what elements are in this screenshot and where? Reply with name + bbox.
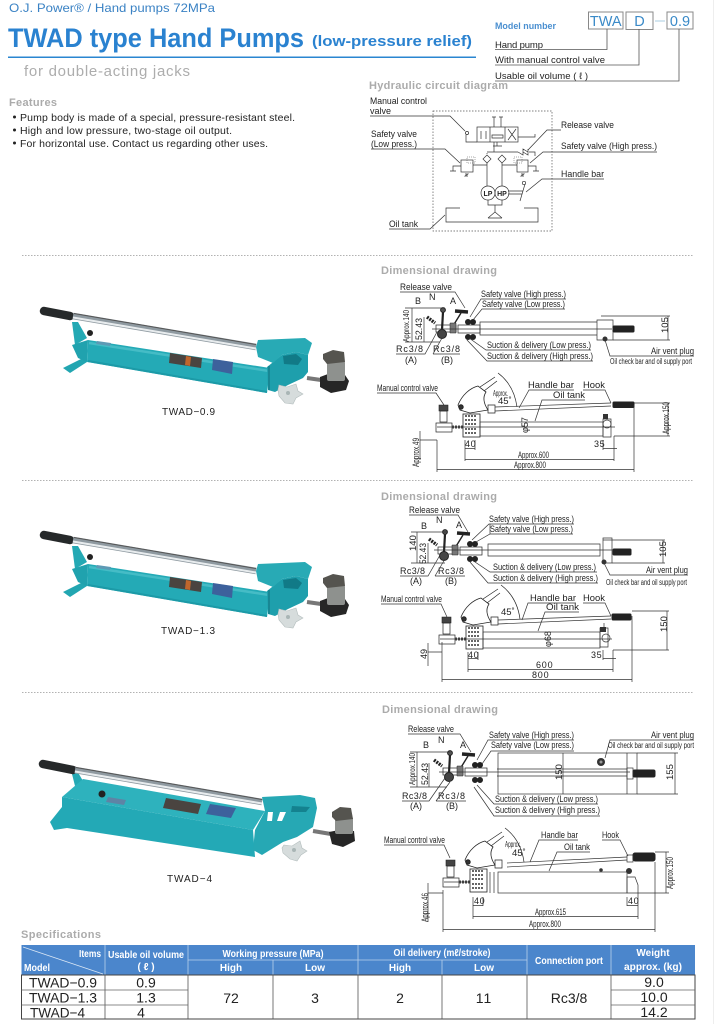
dimensional drawing TWAD-1.3: Rc3/8 bbox=[400, 566, 425, 576]
hydraulic circuit diagram: Safety valve (High press.) bbox=[561, 141, 657, 151]
dimensional drawing TWAD-0.9: A bbox=[450, 296, 456, 306]
table body: TWAD−0.9 bbox=[29, 974, 97, 990]
dimensional drawing TWAD-0.9: Approx.800 bbox=[514, 460, 546, 470]
dimensional drawing TWAD-1.3: 600 bbox=[536, 660, 553, 670]
dimensional drawing TWAD-4: 45˚ bbox=[512, 848, 526, 859]
dimensional drawing TWAD-0.9: Release valve bbox=[400, 282, 452, 293]
dimensional drawing TWAD-4: (A) bbox=[410, 801, 422, 811]
dimensional drawing TWAD-4: Suction & delivery (High press.) bbox=[495, 805, 600, 815]
dimensional drawing TWAD-1.3: 45˚ bbox=[501, 607, 515, 618]
features: Features bbox=[9, 97, 57, 109]
dimensional drawing TWAD-4: Approx.46 bbox=[420, 893, 430, 922]
dimensional drawing TWAD-0.9: Manual control valve bbox=[377, 383, 438, 393]
features: High and low pressure, two-stage oil output. bbox=[20, 125, 232, 137]
dimensional drawing TWAD-1.3: 35 bbox=[591, 650, 602, 660]
table header: Items bbox=[79, 949, 101, 960]
dimensional drawing TWAD-1.3: 49 bbox=[419, 649, 429, 659]
specifications heading: Specifications bbox=[21, 929, 101, 941]
title: TWAD type Hand Pumps bbox=[8, 23, 304, 53]
label TWAD-0.9: TWAD−0.9 bbox=[162, 407, 215, 418]
dimensional drawing TWAD-4: 155 bbox=[665, 764, 676, 780]
table body: Rc3/8 bbox=[551, 990, 587, 1006]
table header: Working pressure (MPa) bbox=[222, 949, 324, 960]
table body: 2 bbox=[396, 990, 404, 1006]
dimensional drawing TWAD-0.9: Oil tank bbox=[553, 390, 585, 401]
dimensional drawing TWAD-4: Rc3/8 bbox=[438, 791, 465, 801]
dimensional drawing TWAD-4: Oil tank bbox=[564, 842, 590, 852]
dimensional drawing TWAD-0.9: Safety valve (High press.) bbox=[481, 289, 566, 299]
page edge bbox=[713, 0, 714, 1024]
dimensional drawing TWAD-1.3: φ68 bbox=[543, 631, 553, 647]
model number key: Model number bbox=[495, 21, 556, 32]
dimensional drawing TWAD-1.3: Air vent plug bbox=[646, 565, 688, 575]
dimensional drawing TWAD-4: Approx.140 bbox=[407, 753, 417, 785]
dimensional drawing TWAD-0.9: 105 bbox=[660, 317, 671, 333]
dimensional drawing TWAD-0.9: Air vent plug bbox=[651, 346, 694, 356]
table header bbox=[22, 945, 695, 975]
dimensional drawing TWAD-0.9: Dimensional drawing bbox=[381, 265, 497, 277]
dimensional drawing TWAD-0.9: (B) bbox=[441, 355, 453, 365]
dimensional drawing TWAD-1.3: Hook bbox=[583, 593, 605, 604]
table body: 3 bbox=[311, 990, 319, 1006]
table body bbox=[22, 974, 695, 1020]
dimensional drawing TWAD-1.3: Rc3/8 bbox=[438, 566, 464, 576]
hydraulic circuit diagram: (Low press.) bbox=[371, 139, 417, 149]
features bbox=[9, 97, 295, 150]
hydraulic circuit heading: Hydraulic circuit diagram bbox=[369, 80, 508, 92]
section divider 2 bbox=[22, 480, 693, 482]
table body: 1.3 bbox=[136, 990, 156, 1006]
dimensional drawing TWAD-1.3: Manual control valve bbox=[381, 594, 442, 604]
table header: High bbox=[220, 963, 242, 974]
dimensional drawing TWAD-4: A bbox=[460, 740, 466, 750]
label TWAD-1.3: TWAD−1.3 bbox=[161, 626, 215, 637]
pump photo TWAD-1.3 bbox=[44, 535, 349, 628]
table header: High bbox=[389, 963, 411, 974]
dimensional drawing TWAD-4: 40 bbox=[474, 896, 485, 906]
dimensional drawing TWAD-4: Manual control valve bbox=[384, 835, 445, 845]
table header: Usable oil volume bbox=[108, 950, 184, 961]
table header: Weight bbox=[636, 948, 670, 959]
label TWAD-4: TWAD−4 bbox=[167, 874, 212, 885]
dimensional drawing TWAD-0.9: 52.43 bbox=[414, 318, 424, 340]
dimensional drawing TWAD-0.9: Rc3/8 bbox=[433, 344, 460, 354]
dimensional drawing TWAD-1.3: 105 bbox=[658, 541, 669, 557]
header breadcrumb: O.J. Power® / Hand pumps 72MPa bbox=[9, 1, 215, 15]
hydraulic circuit diagram: Handle bar bbox=[561, 169, 604, 179]
dimensional drawing TWAD-0.9: Approx.150 bbox=[661, 402, 671, 434]
table header: Model bbox=[24, 963, 50, 974]
dimensional drawing TWAD-4: 40 bbox=[628, 896, 639, 906]
dimensional drawing TWAD-4: Safety valve (High press.) bbox=[489, 730, 574, 740]
dimensional drawing TWAD-1.3: (A) bbox=[410, 576, 422, 586]
dimensional drawing TWAD-4: Dimensional drawing bbox=[382, 704, 498, 716]
dimensional drawing TWAD-1.3: 140 bbox=[408, 535, 419, 551]
model number key: With manual control valve bbox=[495, 55, 605, 66]
hydraulic circuit diagram: LP bbox=[484, 191, 493, 198]
dimensional drawing TWAD-0.9: Safety valve (Low press.) bbox=[482, 299, 565, 309]
dimensional drawing TWAD-4: Approx.800 bbox=[529, 919, 561, 929]
dimensional drawing TWAD-0.9: Approx.140 bbox=[401, 310, 411, 342]
dimensional drawing TWAD-1.3: B bbox=[421, 521, 427, 531]
model number key: Hand pump bbox=[495, 40, 543, 51]
model number key: Usable oil volume ( ℓ ) bbox=[495, 71, 588, 82]
table body: 0.9 bbox=[136, 974, 156, 990]
dimensional drawing TWAD-1.3: A bbox=[456, 520, 462, 530]
table body: 4 bbox=[137, 1004, 145, 1020]
dimensional drawing TWAD-4: Safety valve (Low press.) bbox=[491, 740, 574, 750]
table header: Connection port bbox=[535, 956, 604, 967]
dimensional drawing TWAD-0.9: Approx. bbox=[493, 389, 508, 398]
dimensional drawing TWAD-1.3: Oil tank bbox=[546, 602, 579, 613]
dimensional drawing TWAD-4: Handle bar bbox=[541, 830, 578, 840]
table header: Low bbox=[474, 963, 494, 974]
dimensional drawing TWAD-4: Approx.150 bbox=[665, 857, 675, 889]
dimensional drawing TWAD-1.3: Suction & delivery (Low press.) bbox=[493, 562, 596, 572]
hydraulic circuit diagram: Manual control bbox=[370, 96, 427, 106]
dimensional drawing TWAD-0.9: Approx.600 bbox=[518, 450, 549, 460]
model number key: TWA bbox=[590, 14, 622, 30]
hydraulic circuit diagram: Oil tank bbox=[389, 219, 418, 229]
dimensional drawing TWAD-0.9: 45˚ bbox=[498, 396, 512, 407]
hydraulic circuit diagram: Safety valve bbox=[371, 129, 417, 139]
dimensional drawing TWAD-0.9: Rc3/8 bbox=[396, 344, 423, 354]
dimensional drawing TWAD-1.3: Dimensional drawing bbox=[381, 491, 497, 503]
dimensional drawing TWAD-4: B bbox=[423, 740, 429, 750]
hydraulic circuit diagram: HP bbox=[497, 191, 507, 198]
subtitle: for double-acting jacks bbox=[24, 63, 190, 80]
table body: 11 bbox=[476, 990, 492, 1006]
dimensional drawing TWAD-1.3: Suction & delivery (High press.) bbox=[493, 573, 598, 583]
dimensional drawing TWAD-1.3: 52.43 bbox=[418, 543, 428, 564]
dimensional drawing TWAD-4: Release valve bbox=[408, 724, 454, 735]
title bbox=[8, 23, 476, 58]
features: For horizontal use. Contact us regarding other uses. bbox=[20, 138, 268, 150]
table header: ( ℓ ) bbox=[137, 962, 155, 973]
table header: Oil delivery (mℓ/stroke) bbox=[394, 948, 490, 959]
dimensional drawing TWAD-0.9: Suction & delivery (Low press.) bbox=[487, 340, 591, 350]
specifications table bbox=[22, 945, 695, 1020]
dimensional drawing TWAD-0.9 bbox=[377, 265, 694, 472]
dimensional drawing TWAD-1.3 bbox=[381, 491, 688, 682]
dimensional drawing TWAD-4: 150 bbox=[554, 764, 565, 780]
dimensional drawing TWAD-0.9: 35 bbox=[594, 439, 605, 449]
dimensional drawing TWAD-1.3: 150 bbox=[659, 616, 670, 632]
table body: 9.0 bbox=[644, 974, 664, 990]
model number key: 0.9 bbox=[670, 14, 690, 30]
table header: Low bbox=[305, 963, 325, 974]
dimensional drawing TWAD-4: Hook bbox=[602, 830, 619, 840]
dimensional drawing TWAD-4 bbox=[382, 704, 695, 932]
table body: TWAD−1.3 bbox=[29, 990, 97, 1006]
table body: 14.2 bbox=[640, 1004, 668, 1020]
section divider 3 bbox=[22, 692, 693, 694]
dimensional drawing TWAD-4: N bbox=[438, 735, 444, 745]
dimensional drawing TWAD-4: 52.43 bbox=[420, 763, 430, 785]
dimensional drawing TWAD-1.3: (B) bbox=[445, 576, 457, 586]
dimensional drawing TWAD-4: (B) bbox=[446, 801, 458, 811]
title: (low-pressure relief) bbox=[312, 33, 472, 50]
dimensional drawing TWAD-0.9: Suction & delivery (High press.) bbox=[487, 351, 593, 361]
dimensional drawing TWAD-0.9: Hook bbox=[583, 380, 605, 391]
section divider 1 bbox=[22, 254, 693, 256]
dimensional drawing TWAD-4: Air vent plug bbox=[651, 730, 694, 740]
dimensional drawing TWAD-1.3: N bbox=[436, 515, 442, 525]
dimensional drawing TWAD-0.9: N bbox=[429, 292, 436, 302]
dimensional drawing TWAD-0.9: φ57 bbox=[520, 417, 530, 433]
dimensional drawing TWAD-0.9: Handle bar bbox=[528, 380, 574, 391]
table body: 10.0 bbox=[640, 989, 668, 1005]
model number key bbox=[495, 12, 693, 82]
dimensional drawing TWAD-0.9: Approx.49 bbox=[411, 438, 421, 467]
pump photo TWAD-4 bbox=[43, 764, 355, 861]
dimensional drawing TWAD-0.9: B bbox=[415, 296, 421, 306]
table header: approx. (kg) bbox=[624, 962, 682, 973]
hydraulic circuit diagram: Release valve bbox=[561, 120, 614, 130]
pump photo TWAD-0.9 bbox=[44, 311, 349, 404]
dimensional drawing TWAD-4: Suction & delivery (Low press.) bbox=[495, 794, 598, 804]
dimensional drawing TWAD-4: Approx.615 bbox=[535, 907, 566, 917]
dimensional drawing TWAD-0.9: 40 bbox=[465, 439, 476, 449]
dimensional drawing TWAD-0.9: (A) bbox=[405, 355, 417, 365]
dimensional drawing TWAD-1.3: Handle bar bbox=[530, 593, 576, 604]
dimensional drawing TWAD-1.3: Release valve bbox=[409, 505, 460, 516]
dimensional drawing TWAD-1.3: 40 bbox=[468, 650, 479, 660]
features: Pump body is made of a special, pressure-resistant steel. bbox=[20, 112, 295, 124]
dimensional drawing TWAD-1.3: 800 bbox=[532, 670, 549, 680]
dimensional drawing TWAD-1.3: Safety valve (Low press.) bbox=[490, 524, 573, 534]
hydraulic circuit diagram bbox=[370, 96, 657, 231]
hydraulic circuit diagram: valve bbox=[370, 106, 391, 116]
dimensional drawing TWAD-4: Rc3/8 bbox=[402, 791, 427, 801]
dimensional drawing TWAD-1.3: Safety valve (High press.) bbox=[489, 514, 574, 524]
model number key: D bbox=[634, 14, 645, 30]
dimensional drawing TWAD-4: Approx. bbox=[505, 840, 521, 849]
table body: 72 bbox=[223, 990, 239, 1006]
table body: TWAD−4 bbox=[30, 1004, 85, 1020]
